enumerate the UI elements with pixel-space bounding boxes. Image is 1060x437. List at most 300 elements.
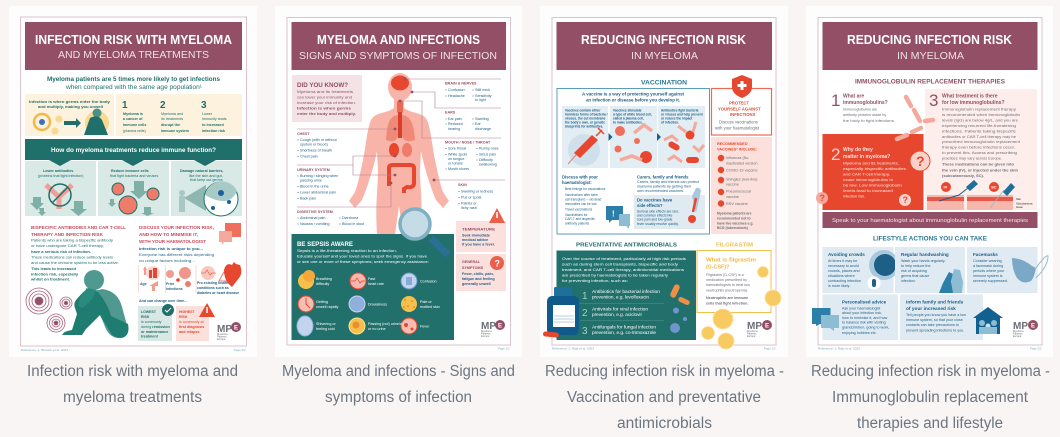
side effects box: Serious side effects are rare,	[637, 210, 679, 214]
antimicrobials panel	[556, 250, 696, 340]
risk factor icons	[138, 262, 241, 303]
vaccination panel	[557, 88, 710, 234]
section 2: red panel: especially bispecific antibodies	[843, 167, 906, 171]
vaccine step 3: or reduce the impact	[661, 116, 693, 120]
lifestyle: facemasks: immune system is	[973, 274, 1003, 278]
caption 2: Myeloma and infections - Signs and	[282, 363, 515, 380]
lifestyle heading: LIFESTYLE ACTIONS YOU CAN TAKE	[873, 236, 987, 242]
sepsis icons row 1: Fast	[368, 277, 375, 281]
vaccine step 2: called a plasma cell,	[613, 116, 644, 120]
recommended vaccines panel: VACCINES* INCLUDE:	[717, 148, 757, 152]
lifestyle: handwashing: risk of acquiring	[901, 269, 927, 273]
panel: damage natural barriers	[171, 161, 242, 216]
section 3: treatment panel: levels (IgG) are below 4g/L, and you are	[942, 118, 1018, 122]
header banner 4	[822, 22, 1038, 70]
section 2: red panel: cause immunoglobulins to	[843, 178, 893, 182]
symptom lists right: MOUTH / NOSE / THROAT	[445, 140, 491, 144]
bispecific antibodies text: BISPECIFIC ANTIBODIES AND CAR T-CELL	[31, 225, 126, 230]
temperature box	[456, 208, 506, 252]
section 2: red panel: levels lead to increased	[843, 189, 893, 193]
filgrastim box: cells that fight infection.	[706, 302, 748, 306]
protect box: Discuss vaccinations	[719, 120, 758, 124]
caption 3: antimicrobials	[617, 415, 712, 432]
vaccine step 3: Antibodies fight bacteria	[661, 108, 699, 112]
numbered facts: Lower	[202, 112, 213, 116]
lifestyle: inform family: of your increased risk	[906, 306, 956, 312]
teal question band	[25, 139, 242, 166]
lifestyle: avoiding crowds: Avoiding crowds	[828, 252, 865, 257]
logo: MPE 4: Europe	[1013, 334, 1022, 338]
symptom lists left: Blood in the urine	[300, 184, 329, 188]
numbered facts: Myeloma is	[123, 112, 143, 116]
lifestyle: inform family: Tell people you know you have a low	[906, 313, 966, 317]
symptom lists right: Painful or	[461, 202, 477, 206]
symptom lists left: CHEST	[297, 132, 310, 136]
vaccine step 3: of infection.	[661, 120, 679, 124]
recommended vaccines panel: COVID-19 vaccine	[726, 168, 757, 172]
vaccine step 3	[658, 106, 705, 168]
panel: reduce immune cells: that fight bacteria and viruses	[110, 174, 158, 178]
logo: MPE 2: Patients	[481, 332, 491, 336]
antimicrobials panel: 3	[582, 326, 588, 337]
discuss list: cell transplant, – old dead	[565, 198, 602, 202]
recommended vaccines panel: Shingles (non-live)	[726, 178, 758, 182]
bispecific antibodies text: whilst on treatment.	[30, 278, 70, 282]
recommended vaccines panel: inactivated version	[726, 162, 757, 166]
section 3: treatment panel: therapy even before infections occur,	[942, 146, 1015, 150]
antimicrobials panel: Antibiotics for bacterial infection	[592, 289, 661, 294]
panel: damage natural barriers: that keep out germs	[190, 178, 223, 182]
caption 4: therapies and lifestyle	[857, 415, 1003, 432]
section 1: what are immunoglobulins: antibody proteins made by	[843, 113, 886, 117]
teal question band: How do myeloma treatments reduce immune function?	[51, 147, 216, 154]
section 3: treatment panel: Immunoglobulin replacement therapy	[942, 108, 1016, 112]
caption 3: Reducing infection risk in myeloma -	[545, 363, 784, 380]
logo: MPE 4: Myeloma	[1013, 329, 1024, 333]
symptom lists right: Ear	[475, 122, 482, 126]
vaccine step 1: Vaccines contain either	[565, 108, 601, 112]
discuss risk text: on unique factors including...	[139, 259, 195, 263]
logo: MPE 2	[481, 320, 505, 338]
header banner 1: INFECTION RISK WITH MYELOMA	[35, 32, 233, 47]
section 3: treatment panel: to prevent this. Access and prescribing	[942, 151, 1017, 155]
section 2: red panel: Why do they	[843, 147, 873, 153]
caption 4: Reducing infection risk in myeloma -	[811, 363, 1050, 380]
logo: MPE 1: Patients	[217, 334, 227, 338]
sepsis icons row 2: Getting	[316, 300, 328, 304]
yellow neutrophil cells	[702, 266, 781, 349]
sepsis icons row 3	[297, 316, 430, 336]
section 1: what are immunoglobulins: immunoglobulins?	[843, 100, 888, 106]
caption 1: Infection risk with myeloma and	[27, 363, 238, 380]
lowest risk box: during remission	[141, 325, 170, 329]
section 3: treatment panel: antibodies or CAR T-cell therapy may be	[942, 135, 1016, 139]
symptom lists right: Sinus pain	[479, 152, 496, 156]
header banner 1	[25, 22, 242, 70]
did you know box: increase your risk of infection.	[297, 101, 356, 105]
symptom lists left: Blood in stool	[342, 222, 364, 226]
sepsis icons row 3: feeling cold	[316, 327, 335, 331]
logo: MPE 3: Patients	[747, 332, 757, 336]
logo: MPE 3: Europe	[747, 334, 756, 338]
section 3: treatment panel: prescribed immunoglobulin replacement	[942, 140, 1020, 144]
panel: damage natural barriers: Damage natural barriers,	[180, 169, 223, 173]
risk factor icons: And can change over time...	[139, 299, 187, 303]
lowest risk box: RISK	[141, 315, 150, 319]
filgrastim box	[697, 250, 771, 312]
recommended vaccines panel: BCG (tuberculosis)	[717, 226, 748, 230]
icon: IV and SC injections: IV	[944, 184, 948, 190]
symptom lists left: passing urine	[300, 178, 322, 182]
lifestyle: personalised advice: Personalised advice	[842, 300, 887, 304]
sepsis icons row 2: Drowsiness	[368, 302, 387, 306]
poster 3: vaccination and antimicrobials	[540, 6, 788, 357]
section 3: treatment panel: for low immunoglobulins?	[942, 100, 1004, 106]
lifestyle: avoiding crowds: necessary to avoid	[828, 264, 859, 268]
icon: magnifying glass	[400, 209, 448, 255]
lifestyle: facemasks: Facemasks	[973, 252, 998, 257]
bispecific antibodies text: These medications can reduce antibody levels	[31, 256, 113, 260]
header banner 3: REDUCING INFECTION RISK	[581, 32, 747, 47]
footer 2: Page 1/2	[498, 346, 510, 350]
discuss risk text: Everyone has different risks depending	[139, 253, 214, 257]
symptom lists right: Mouth ulcers	[448, 167, 469, 171]
did you know box: can lower your immunity and	[297, 96, 352, 100]
section 2: red panel: Myeloma and its treatments,	[843, 162, 899, 166]
risk factor icons: conditions such as	[197, 286, 229, 290]
header banner 2: MYELOMA AND INFECTIONS	[317, 32, 480, 47]
antimicrobials panel: treatment, and CAR T-cell therapy, antimicrobial medications	[562, 268, 684, 272]
protect box	[712, 75, 772, 135]
recommended vaccines panel: RECOMMENDED	[717, 142, 748, 146]
section 1: what are immunoglobulins	[831, 91, 895, 123]
section 2: red panel: 2	[831, 145, 840, 164]
panel: damage natural barriers: like the skin and gut,	[189, 174, 223, 178]
vaccination heading: VACCINATION	[641, 80, 687, 86]
lifestyle: personalised advice: to balance risk with visiting	[842, 320, 886, 324]
symptom lists left: Diarrhoea	[342, 216, 359, 220]
icon: concentric rings	[26, 288, 72, 332]
lifestyle: inform family: Inform family and friends	[906, 300, 964, 306]
caption 4: Immunoglobulin replacement	[832, 389, 1029, 406]
temperature box: TEMPERATURE	[462, 228, 496, 232]
sepsis icons row 3: Fever	[420, 324, 430, 328]
discuss list: Vaccinations after stem	[565, 193, 598, 197]
section 3: treatment panel: the vein (IV), or injected under the skin	[942, 168, 1019, 172]
antimicrobials heading: PREVENTATIVE ANTIMICROBIALS	[576, 242, 677, 248]
logo: MPE 4	[1013, 320, 1038, 338]
protect box: with your haematologist	[715, 126, 760, 130]
vaccine step 1: harmless forms of bacteria /	[565, 112, 608, 116]
discuss list: antibody patients	[565, 222, 590, 226]
temperature box: Seek immediate	[462, 234, 490, 238]
header banner 4: REDUCING INFECTION RISK	[847, 32, 1013, 47]
lifestyle: avoiding crowds: is more likely.	[828, 284, 850, 288]
icon: speech bubbles blue: !	[612, 210, 615, 218]
immunoglobulin heading: IMMUNOGLOBULIN REPLACEMENT THERAPIES	[855, 80, 1005, 86]
logo: MPE 1: E	[234, 326, 238, 332]
lifestyle: handwashing: infection.	[901, 279, 916, 283]
lifestyle: avoiding crowds	[822, 247, 899, 293]
symptom lists left: Abdominal pain	[300, 216, 325, 220]
logo: MPE 1: Myeloma	[217, 332, 228, 336]
filgrastim heading: FILGRASTIM	[716, 242, 753, 248]
header banner 3	[556, 22, 772, 70]
symptom lists right: Stiff neck	[475, 88, 490, 92]
panel: lower antibodies: Lower antibodies	[43, 169, 73, 173]
section 1: what are immunoglobulins: 1	[831, 91, 840, 110]
icons: question marks: ?	[902, 195, 908, 205]
discuss risk text: Infection risk is unique to you...	[139, 247, 203, 251]
antimicrobials panel: for preventing infection, such as:	[562, 279, 628, 283]
lifestyle: personalised advice	[812, 294, 898, 340]
risk factor icons: Age	[140, 282, 147, 286]
caption 1: myeloma treatments	[63, 389, 202, 406]
icon: thermometer	[688, 188, 701, 223]
caption 3: Vaccination and preventative	[567, 389, 761, 406]
symptom lists right: Sore throat	[448, 146, 466, 150]
lifestyle: avoiding crowds: situations where	[828, 274, 855, 278]
recommended vaccines panel: vaccine	[726, 195, 739, 199]
filgrastim box: medication prescribed by	[706, 278, 747, 282]
connector lines	[297, 78, 505, 207]
protect box: INFECTIONS	[730, 112, 756, 117]
icon: antibody	[897, 97, 933, 139]
bispecific antibodies text: infection risk, especially	[31, 272, 79, 276]
bispecific antibodies text: This leads to increased	[31, 267, 77, 271]
temperature box: medical advice	[462, 238, 488, 242]
section 3: treatment panel: What treatment is there	[942, 94, 998, 100]
side effects box: and common effects like	[637, 214, 673, 218]
risk factor icons: Pre-existing health	[197, 281, 228, 285]
sepsis icons row 1: heart rate	[368, 282, 384, 286]
section 3: treatment panel: practices may vary across Europe.	[942, 156, 1002, 160]
numbered facts: immune system	[161, 129, 190, 133]
sepsis icons row 1	[298, 270, 437, 289]
lifestyle: inform family: prevent spreading infections to you.	[906, 328, 964, 332]
icon: IV and SC injections: SC	[991, 184, 997, 190]
risk factor icons: Prior	[166, 282, 175, 286]
general symptoms box: generally unwell	[462, 282, 491, 286]
lifestyle: inform family: immune system, so that your close	[906, 318, 963, 322]
panel: lower antibodies: (proteins that fight infection)	[38, 174, 84, 178]
symptom lists right: swallowing	[479, 162, 497, 166]
did you know box: Myeloma and its treatments	[297, 90, 353, 94]
icon: pill bottle	[543, 287, 579, 338]
recommended vaccines panel: vaccine	[726, 182, 739, 186]
filgrastim box: neutrophils (neutropenia).	[706, 288, 748, 292]
carers text: Carers, family and friends can protect	[637, 180, 699, 184]
discuss risk text: WITH YOUR HAEMATOLOGIST	[139, 239, 206, 244]
tagline	[47, 76, 221, 91]
antimicrobials panel: prevention, e.g. levofloxacin	[592, 294, 650, 300]
footer 1: Page 2/2	[234, 348, 246, 352]
caption 4	[811, 363, 1050, 432]
bispecific antibodies text: and cause the immune system to be less active.	[31, 261, 119, 265]
general symptoms box: ?	[494, 258, 500, 268]
sepsis panel	[292, 234, 454, 340]
symptom lists right: or tonsils	[448, 162, 463, 166]
protect box: PROTECT	[729, 100, 749, 106]
vaccine step 3: or viruses and help prevent	[661, 112, 704, 116]
icon: IV and SC injections: Skin	[1016, 197, 1022, 201]
symptom lists right: Sensitivity	[475, 94, 492, 98]
discuss list	[562, 174, 606, 226]
section 1: what are immunoglobulins: Immunoglobulins are	[843, 108, 877, 112]
symptom lists right: to light	[475, 98, 486, 102]
speak to haematologist band	[822, 212, 1038, 228]
filgrastim box: Filgrastim (G-CSF) is a	[706, 273, 745, 277]
logo: MPE 4: E	[1031, 324, 1035, 330]
vaccine step 1: the body's own, or genetic	[565, 120, 605, 124]
logo: MPE 3: Myeloma	[747, 329, 758, 333]
protect box: YOURSELF AGAINST	[718, 106, 761, 112]
sepsis icons row 3: Passing (not) urine/d	[368, 322, 402, 326]
icon: sitting figure	[62, 270, 128, 338]
discuss list: haematologist:	[562, 180, 592, 185]
section 3: treatment panel: 3	[929, 91, 938, 110]
section 1: what are immunoglobulins: What are	[843, 94, 864, 100]
highest risk box: and relapse	[179, 330, 200, 334]
lifestyle: inform family	[900, 294, 983, 340]
symptom lists left: Back pain	[300, 196, 316, 200]
vaccine step 1	[562, 106, 608, 168]
lowest risk box: treatment	[141, 334, 159, 338]
did you know box: enter the body and multiply.	[297, 112, 356, 116]
highest risk box: is commonly at	[179, 320, 204, 324]
numbered facts: a cancer of	[123, 117, 143, 121]
lowest risk box: or maintenance	[141, 330, 168, 334]
cream definition band: and multiply, making you unwell	[38, 104, 103, 109]
symptom lists right: Reduced	[448, 122, 463, 126]
symptom lists right: Runny nose	[479, 146, 499, 150]
footer 3	[552, 346, 776, 350]
lifestyle: personalised advice: grandchildren, going to work,	[842, 326, 889, 330]
recommended vaccines panel: Influenza (flu-	[726, 156, 750, 160]
footer 3: Reference: 1. Raje et al. 2023	[552, 346, 594, 350]
side effects box	[634, 195, 705, 229]
footer 4: Reference: 1. Raje et al. 2023	[818, 346, 860, 350]
highest risk box: RISK	[179, 315, 188, 319]
header banner 3: IN MYELOMA	[631, 50, 698, 62]
icons: question marks: ?	[820, 193, 825, 203]
symptom lists left: Shortness of breath	[300, 148, 332, 152]
lifestyle: avoiding crowds: At times it may be	[828, 259, 857, 263]
caption 2: symptoms of infection	[325, 389, 472, 406]
discuss list: Best timings for vaccinations	[565, 187, 606, 191]
logo: MPE 4: MP	[1013, 321, 1028, 332]
symptom lists right: on tongue	[448, 157, 464, 161]
symptom lists right: Swelling	[475, 117, 489, 121]
poster 2: signs and symptoms	[275, 6, 522, 357]
antimicrobials panel: such as during stem cell transplants, bispecific and body	[562, 262, 678, 266]
header banner 2: SIGNS AND SYMPTOMS OF INFECTION	[299, 50, 497, 62]
antimicrobials panel: Antivirals for viral infection	[592, 306, 649, 312]
sepsis icons row 1: difficulty	[316, 282, 329, 286]
section 3: treatment panel	[925, 89, 1037, 210]
symptom lists left: Lower abdominal pain	[300, 190, 336, 194]
icon: speech bubbles salmon	[219, 223, 241, 245]
lowest risk box	[138, 304, 174, 341]
symptom lists right: Ear pain	[448, 117, 462, 121]
vaccine step 1: viruses, the cut membrane	[565, 116, 606, 120]
lifestyle: handwashing: germs that cause	[901, 274, 929, 278]
discuss list: immunities can be lost	[565, 202, 597, 206]
lifestyle: handwashing	[895, 247, 965, 293]
organs	[386, 76, 415, 193]
logo: MPE 2: Europe	[481, 334, 490, 338]
vaccine step 2: a type of white blood cell,	[613, 112, 652, 116]
icons: question marks	[816, 151, 930, 206]
bispecific antibodies text: have a serious risk of infection.	[31, 250, 91, 254]
icons: question marks: ?	[916, 153, 925, 169]
footer 3: Page 1/2	[764, 346, 776, 350]
sepsis panel: Sepsis is a life-threatening reaction to an infection.	[297, 249, 397, 253]
symptom lists right: SKIN	[458, 183, 467, 187]
recommended vaccines panel: Myeloma patients are	[717, 212, 752, 216]
section 3: treatment panel: (subcutaneously, SC).	[942, 174, 984, 178]
symptom lists right: Swelling or redness	[461, 190, 493, 194]
caption 3	[545, 363, 784, 432]
sepsis icons row 3: or no urine	[368, 327, 386, 331]
sepsis panel: BE SEPSIS AWARE	[297, 241, 354, 248]
symptom lists right: Confusion	[448, 88, 465, 92]
numbered facts: (plasma cells)	[123, 129, 146, 133]
lifestyle: avoiding crowds: contracting infection	[828, 279, 861, 283]
lifestyle: avoiding crowds: crowds, places and	[828, 269, 860, 273]
sepsis icons row 1: Confusion	[420, 280, 437, 284]
discuss list: CAR-T and bispecific	[565, 217, 595, 221]
lifestyle: facemasks: severely suppressed.	[973, 279, 1008, 283]
symptom lists right: Headache	[448, 94, 465, 98]
filgrastim box: Neutrophils are immune	[706, 296, 748, 300]
sepsis icons row 2: mottled skin	[420, 305, 440, 309]
temperature box: if you have a fever.	[462, 242, 495, 246]
symptom lists left: sputum or blood)	[300, 142, 328, 146]
body illustration	[349, 73, 449, 234]
side effects box: Do vaccines have	[637, 198, 673, 202]
numbered facts: 2	[160, 100, 166, 111]
footer 4	[818, 346, 1042, 350]
numbered facts: Myeloma and	[161, 112, 183, 116]
discuss risk text: DISCUSS YOUR INFECTION RISK,	[139, 225, 214, 230]
carers text: myeloma patients by getting their	[637, 184, 692, 188]
sepsis icons row 3: Shivering or	[316, 322, 336, 326]
vaccine step 2	[610, 106, 657, 168]
lifestyle: handwashing: Wash your hands regularly	[901, 259, 945, 263]
tagline: Myeloma patients are 5 times more likely to get infections	[47, 76, 221, 83]
logo: MPE 4: Patients	[1013, 332, 1023, 336]
discuss risk text: AND HOW TO MINIMISE IT,	[139, 232, 198, 237]
antimicrobials panel: Over the course of treatment, particularly at high risk periods	[562, 257, 686, 261]
footer 1	[21, 348, 246, 352]
panel: reduce immune cells	[98, 161, 169, 216]
bispecific antibodies text: THERAPY AND INFECTION RISK	[31, 232, 103, 237]
logo: MPE 1: MP	[217, 324, 232, 335]
lifestyle: personalised advice: how to minimise it, and how	[842, 316, 888, 320]
numbered facts: 1	[122, 100, 128, 111]
symptom lists right: Pus or spots	[461, 196, 482, 200]
recommended vaccines panel: recommended not to	[717, 216, 751, 220]
vaccination panel: A vaccine is a way of protecting yourself against	[582, 92, 685, 96]
numbered facts: immune cells	[123, 123, 146, 127]
numbered facts: immunity leads	[202, 117, 227, 121]
antimicrobials panel: are prescribed by haematologists to be taken regularly	[562, 274, 668, 278]
lifestyle: handwashing: to help reduce the	[901, 264, 931, 268]
vaccine step 1: blueprints for antibodies.	[565, 124, 603, 128]
recommended vaccines panel	[711, 137, 772, 234]
did you know box: Infection is when germs	[297, 106, 351, 110]
